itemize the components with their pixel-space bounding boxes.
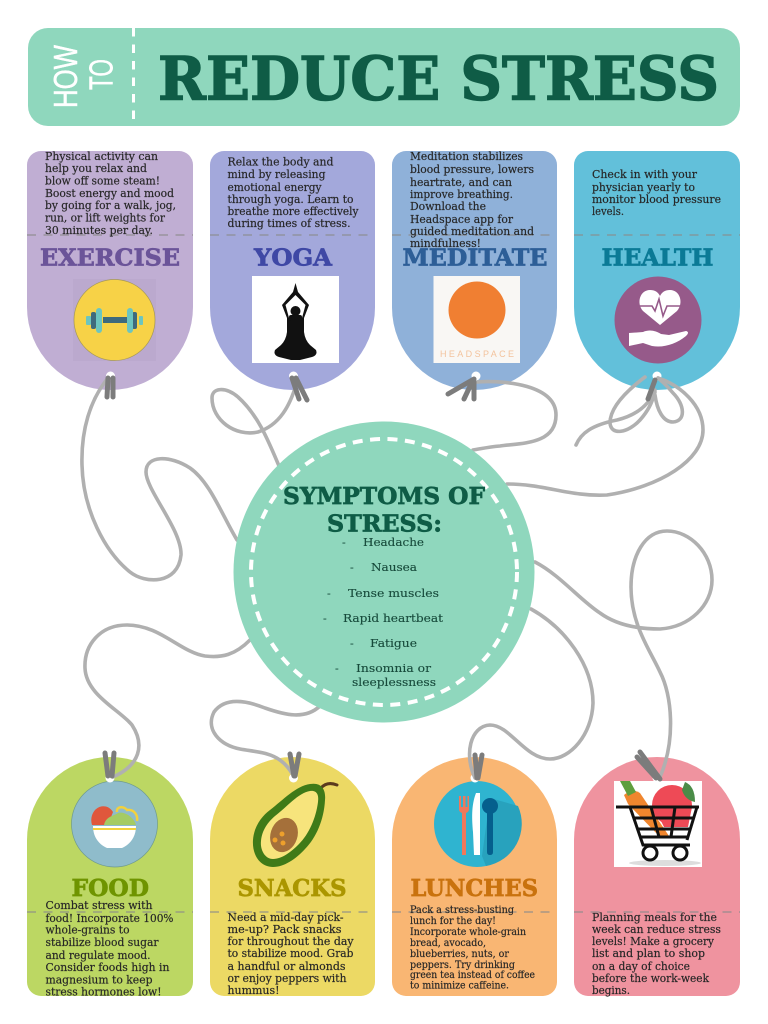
health text: monitor blood pressure <box>592 193 721 206</box>
food heading: FOOD <box>72 874 149 902</box>
food text: Consider foods high in <box>46 961 170 974</box>
snacks text <box>228 911 354 997</box>
exercise text: by going for a walk, jog, <box>45 199 176 212</box>
icon: cutlery <box>434 781 522 867</box>
food text: whole-grains to <box>46 924 130 936</box>
symptoms list <box>323 536 444 689</box>
meditate text: guided meditation and <box>410 225 534 238</box>
yoga text: breathe more effectively <box>228 205 359 218</box>
symptoms list: - <box>350 561 354 574</box>
yoga text <box>228 156 359 230</box>
health text <box>592 168 721 218</box>
icon: grocery cart <box>614 781 702 867</box>
exercise text: help you relax and <box>45 162 147 175</box>
meditate text: mindfulness! <box>410 237 481 250</box>
heading: how to <box>47 44 120 108</box>
food text: stress hormones low! <box>46 986 162 998</box>
symptoms list: Tense muscles <box>348 587 439 600</box>
exercise text: run, or lift weights for <box>45 212 166 224</box>
meditate text <box>410 150 534 250</box>
symptoms list: - <box>323 612 327 625</box>
lunches text <box>410 905 535 992</box>
symptoms list: Rapid heartbeat <box>343 612 444 625</box>
exercise text: blow off some steam! <box>45 174 160 188</box>
snacks text: me-up? Pack snacks <box>228 923 342 936</box>
health heading: HEALTH <box>602 244 714 272</box>
snacks text: Need a mid-day pick- <box>228 911 344 924</box>
lunches text: bread, avocado, <box>410 938 486 949</box>
planning text <box>592 911 721 997</box>
snacks text: to stabilize mood. Grab <box>228 947 354 960</box>
lunches text: to minimize caffeine. <box>410 980 509 992</box>
snacks text: for throughout the day <box>228 935 354 948</box>
planning text: Planning meals for the <box>592 911 717 924</box>
snacks text: hummus! <box>228 984 280 997</box>
lunches heading: LUNCHES <box>410 874 538 902</box>
symptoms heading: STRESS: <box>327 510 442 538</box>
panel: meditate <box>392 150 557 390</box>
title: reduce stress: REDUCE STRESS <box>158 44 719 114</box>
meditate heading: MEDITATE <box>402 244 548 272</box>
panel: exercise <box>27 150 193 390</box>
symptoms list: - <box>350 637 354 650</box>
planning text: list and plan to shop <box>592 947 705 960</box>
panel: symptoms of stress <box>234 422 534 722</box>
exercise text: Boost energy and mood <box>45 187 174 200</box>
panel: yoga <box>210 151 375 390</box>
meditate text: improve breathing. <box>410 188 513 201</box>
planning text: week can reduce stress <box>592 923 721 936</box>
symptoms list: - <box>327 587 331 600</box>
icon: headspace logo <box>434 276 520 363</box>
symptoms heading <box>283 482 485 538</box>
icon: headspace logo: HEADSPACE <box>440 349 514 359</box>
symptoms list: - <box>335 662 339 675</box>
symptoms list: sleeplessness <box>352 676 436 689</box>
lunches text: peppers. Try drinking <box>410 960 515 971</box>
food text: Combat stress with <box>46 899 153 912</box>
food text: stabilize blood sugar <box>46 936 159 949</box>
panel: snacks <box>210 757 375 997</box>
panel: food <box>27 757 193 998</box>
yoga text: through yoga. Learn to <box>228 193 354 206</box>
strings connecting tags to circle <box>82 377 712 778</box>
header banner <box>28 28 740 126</box>
planning text: begins. <box>592 984 630 997</box>
heading: how to: HOW <box>47 44 84 108</box>
planning text: on a day of choice <box>592 960 690 973</box>
health text: Check in with your <box>592 168 698 181</box>
meditate text: blood pressure, lowers <box>410 163 534 176</box>
lunches text: Incorporate whole-grain <box>410 927 526 938</box>
food text: food! Incorporate 100% <box>46 912 174 925</box>
symptoms heading: SYMPTOMS OF <box>283 482 485 510</box>
lunches text: lunch for the day! <box>410 916 496 927</box>
planning text: before the work-week <box>592 972 709 985</box>
meditate text: Headspace app for <box>410 213 514 226</box>
heading: how to: TO <box>82 59 120 90</box>
lunches text: Pack a stress-busting <box>410 905 514 916</box>
tag clips <box>105 378 660 779</box>
meditate text: heartrate, and can <box>410 176 512 189</box>
snacks text: a handful or almonds <box>228 960 346 973</box>
yoga text: mind by releasing <box>228 168 326 181</box>
icon: yoga pose <box>252 276 339 363</box>
exercise text: Physical activity can <box>45 150 158 163</box>
icon: salad bowl <box>72 781 158 867</box>
yoga text: during times of stress. <box>228 217 350 230</box>
exercise text: 30 minutes per day. <box>45 224 153 237</box>
food text: magnesium to keep <box>46 974 153 986</box>
icon: avocado <box>253 784 337 867</box>
health text: levels. <box>592 205 624 218</box>
food text <box>46 899 174 998</box>
exercise heading: EXERCISE <box>40 244 180 272</box>
snacks heading: SNACKS <box>238 874 346 902</box>
lunches text: green tea instead of coffee <box>410 970 535 981</box>
icon: dumbbell <box>73 279 156 361</box>
planning text: levels! Make a grocery <box>592 935 715 948</box>
meditate text: Download the <box>410 200 486 213</box>
lunches text: blueberries, nuts, or <box>410 949 509 960</box>
yoga text: emotional energy <box>228 181 322 194</box>
symptoms list: Fatigue <box>370 637 417 650</box>
snacks text: or enjoy peppers with <box>228 972 347 985</box>
symptoms list: Nausea <box>371 561 417 574</box>
symptoms list: Insomnia or <box>356 662 432 675</box>
yoga heading: YOGA <box>253 244 333 272</box>
health text: physician yearly to <box>592 181 695 194</box>
exercise text <box>45 150 176 237</box>
panel: health <box>574 151 740 390</box>
food text: and regulate mood. <box>46 949 150 962</box>
icon: heart in hand <box>614 276 702 364</box>
yoga text: Relax the body and <box>228 156 334 168</box>
panel: lunches <box>392 757 557 996</box>
punched tag holes <box>106 372 662 782</box>
symptoms list: - <box>342 536 346 549</box>
symptoms list: Headache <box>363 536 424 549</box>
panel: planning <box>574 757 740 997</box>
meditate text: Meditation stabilizes <box>410 150 523 163</box>
